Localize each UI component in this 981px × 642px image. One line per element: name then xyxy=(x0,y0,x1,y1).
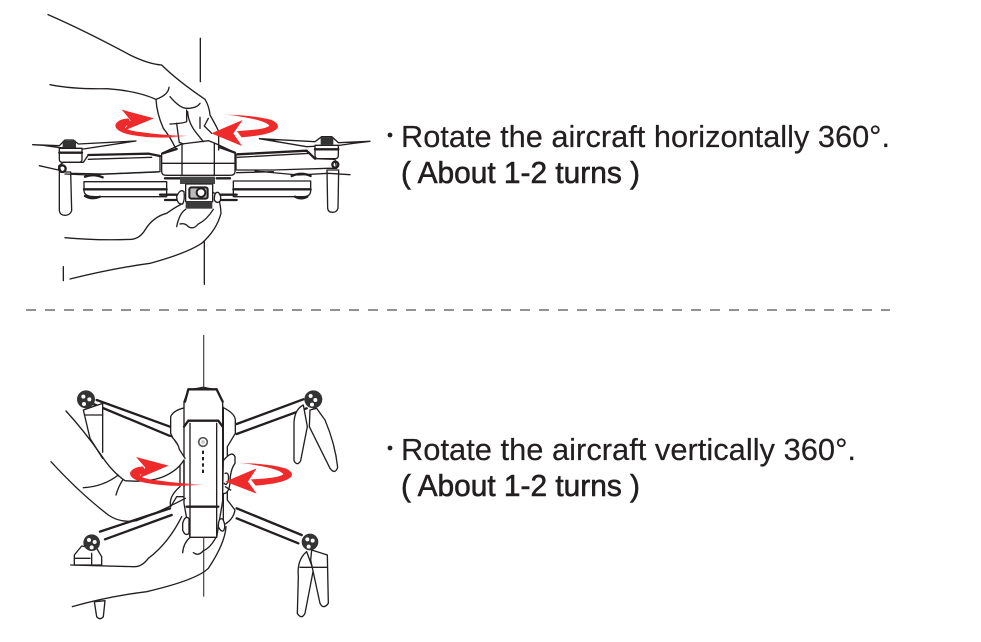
side shoulders xyxy=(170,407,235,525)
folded propellers xyxy=(74,403,338,619)
vertical axis line xyxy=(202,335,206,597)
bullet xyxy=(388,446,392,450)
lower hand gripping drone xyxy=(71,517,226,607)
drone right arms and propellers xyxy=(217,137,370,212)
red arrow: right xyxy=(225,463,292,494)
red arrow: left xyxy=(130,457,205,486)
fingers on right side xyxy=(223,454,235,494)
red arrow: right xyxy=(211,114,278,146)
drone arms xyxy=(93,399,307,543)
bullet xyxy=(388,133,392,137)
instruction line: Rotate the aircraft vertically 360°. xyxy=(401,432,856,467)
battery button and LEDs xyxy=(199,438,207,473)
upper hand gripping drone xyxy=(48,15,219,150)
lower hand gripping drone xyxy=(63,191,221,281)
text block: vertical rotation instruction xyxy=(388,432,856,503)
upper hand gripping drone xyxy=(51,411,186,521)
instruction line: Rotate the aircraft horizontally 360°. xyxy=(401,119,890,154)
turns note: ( About 1-2 turns ) xyxy=(401,155,640,190)
illustration: horizontal rotation of drone held in two hands xyxy=(33,15,370,284)
drone left arms and propellers xyxy=(33,140,182,215)
propeller hubs xyxy=(77,390,322,551)
drone body xyxy=(184,387,223,537)
dashed divider xyxy=(26,309,890,311)
red arrow: left xyxy=(115,110,191,138)
vertical axis line xyxy=(200,38,204,284)
text block: horizontal rotation instruction xyxy=(388,119,890,190)
camera gimbal xyxy=(180,177,215,209)
drone body xyxy=(162,141,235,175)
turns note: ( About 1-2 turns ) xyxy=(401,468,640,503)
illustration: vertical rotation of drone held in two hands xyxy=(51,335,338,619)
